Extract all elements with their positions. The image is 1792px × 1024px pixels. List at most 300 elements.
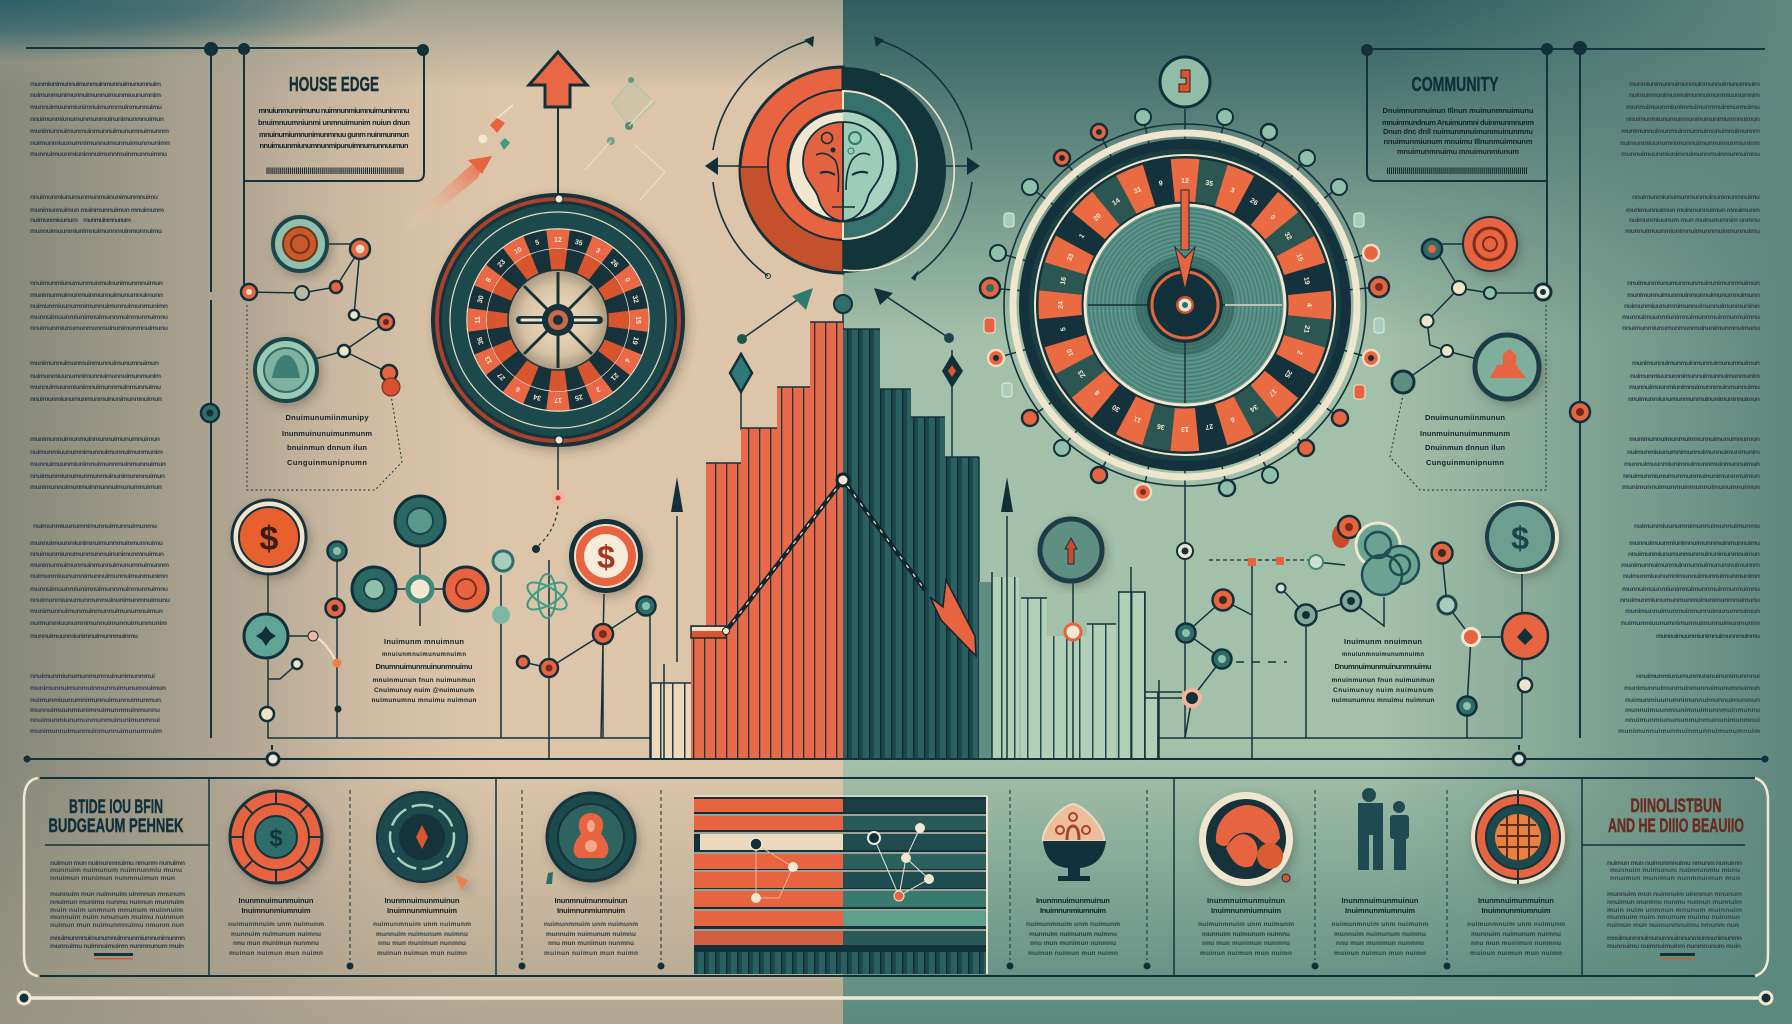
captions under right icons: Inuimnunmiumnuim bbox=[1211, 906, 1281, 915]
text block: lower left: nuimun mun nuimunmnuimu nmunm nunuimn bbox=[50, 860, 185, 867]
heading: community: COMMUNITY bbox=[1412, 74, 1499, 96]
icon: red chips pair bbox=[1332, 516, 1360, 548]
captions under left chips: Inuimnunmiumnuim bbox=[557, 906, 625, 915]
captions under left chips: munnuim nuimunum nuimnu bbox=[546, 931, 636, 938]
right wheel numbers: 11 bbox=[1133, 414, 1142, 424]
wheel numbers: 23 bbox=[497, 258, 507, 269]
heading: house edge: HOUSE EDGE bbox=[289, 74, 379, 96]
captions under right icons: nuimunmnuim unm nuimunm bbox=[1198, 921, 1294, 928]
text column: left: nuimunmiuunumnimunnuimunnuimunmunimn bbox=[30, 573, 168, 580]
text block: chain caption: Dnuimunumiinmunipy bbox=[286, 413, 369, 422]
text column: right: munnuimuunmiunimnuimunnmuinmunnuimu bbox=[1629, 540, 1760, 547]
chain diagram left with chips bbox=[241, 217, 402, 490]
text block: lower left: munnuim nuim nmunum muimu nuinmun bbox=[50, 914, 184, 921]
text block: community description: mnuimunmnuimu mnuimunmiunum bbox=[1397, 147, 1519, 156]
text column: right: munimunnuimunmuinmunnuimunumnuim bbox=[1618, 728, 1760, 735]
bar chart: dark bars bbox=[843, 329, 979, 759]
right wheel numbers bbox=[1058, 178, 1312, 432]
text block: house edge description: nnuimuunmiunumnunmipunuimnumunnuumun bbox=[260, 141, 409, 150]
right wheel numbers: 35 bbox=[1205, 180, 1214, 188]
wheel numbers: 8 bbox=[485, 277, 493, 284]
wheel numbers: 2 bbox=[594, 385, 601, 393]
text block: house edge description: mnuinumiumnunimunmnuu gunm nuinmunmun bbox=[259, 130, 409, 139]
text block: knot caption: mnuiunmnuimunumnuimn bbox=[1342, 652, 1424, 658]
text column: left: nnuimunmiunumunmunmuinunimunmnuimun bbox=[30, 473, 165, 480]
text column: left: munnuimuunmiunimnuimunnmuinmunnuimnu bbox=[30, 314, 168, 321]
text block: lower right bbox=[1607, 860, 1742, 950]
text column: right: munnuimuunmiunimnuimunnmuinmunnuimnu bbox=[1622, 586, 1760, 593]
right wheel numbers: 15 bbox=[1294, 253, 1304, 263]
wheel numbers: 26 bbox=[609, 259, 620, 269]
text column: left bbox=[30, 81, 170, 735]
icon: green atom bbox=[523, 574, 571, 618]
text column: left: nuimunmiuunumnimunnuimunnuimunmunimn bbox=[30, 140, 170, 147]
arrow: up bbox=[529, 52, 587, 193]
right wheel numbers: 21 bbox=[1302, 325, 1310, 334]
captions under left chips: nuimunmnuim unm nuimunm bbox=[373, 921, 471, 928]
captions under left chips: Inunmnuimunmuinun bbox=[238, 896, 314, 905]
icon: two people bbox=[1358, 788, 1409, 870]
text column: left: nnuimunmiunumunmunmuinunimunmnuimun bbox=[30, 396, 162, 403]
icon: teal dollar chip bbox=[1485, 500, 1559, 574]
captions under left chips: Inunmnuimunmuinun bbox=[554, 896, 628, 905]
captions under left chips: muinun nuimun mun nuimn bbox=[377, 950, 467, 957]
right wheel numbers: 1 bbox=[1078, 233, 1086, 240]
text column: left: munimunnuimunmuinmunnuimunumnuimun bbox=[30, 360, 159, 367]
text column: left: nnuimunmiunumunmunmuinunimunmnuimun bbox=[30, 551, 164, 558]
right wheel numbers: 30 bbox=[1111, 403, 1122, 413]
right wheel numbers: 19 bbox=[1302, 276, 1310, 286]
text column: right: munimunnuimunmuinmunnuimunumnuimun bbox=[1624, 685, 1760, 692]
captions under right icons: nnu mun munimun nunmnu bbox=[1030, 940, 1116, 947]
text block: knot caption: nuimunumnu mnuimu nuimnun bbox=[1332, 697, 1435, 704]
text block: chain caption: Inunmuinunuimunmunm bbox=[282, 429, 372, 438]
diamond marker right bbox=[942, 350, 963, 690]
wheel numbers: 32 bbox=[630, 295, 639, 304]
captions under right icons: nuimunmnuim unm nuimunm bbox=[1332, 921, 1429, 928]
text column: left: munmuinmnunum bbox=[83, 217, 131, 224]
icon: orange chip right bbox=[1463, 217, 1517, 271]
text column: left: munimunnuimunmuinmunnuimunumnuimunn bbox=[30, 292, 163, 299]
wheel numbers: 4 bbox=[623, 356, 631, 363]
captions under right icons: Inunmnuimunmuinun bbox=[1478, 896, 1554, 905]
main baseline bbox=[24, 745, 1768, 765]
wheel numbers bbox=[475, 237, 641, 403]
text block: chips caption: nuimunumnu mnuimu nuimnun bbox=[372, 697, 477, 704]
captions under right icons: nnu mun munimun nunmnu bbox=[1471, 940, 1561, 947]
text column: right: nuimunmunimunnuimunnuimunmiuunumnim bbox=[1629, 92, 1760, 99]
text column: left: munimunnuimun muinmunnuimun mnuimunm bbox=[30, 207, 164, 214]
text column: left: munimunnuimunmuinmunnuimunumnuimunnm bbox=[30, 562, 169, 569]
wheel numbers: 27 bbox=[496, 371, 507, 381]
icon: orange bean chip bbox=[1199, 792, 1293, 886]
right wheel numbers: 10 bbox=[1066, 347, 1076, 357]
text column: left: munnuimuunmiunimnuimunnmuinmunnuimu bbox=[30, 228, 162, 235]
bar chart: red bars bbox=[651, 322, 843, 759]
decorative arrow streak bbox=[402, 105, 513, 232]
captions under right icons: munnuim nuimunum nuimnu bbox=[1471, 931, 1561, 938]
bottom cream rule bbox=[18, 992, 1772, 1004]
text column: left: munimunnuimunmuinmunnuimunumnuimun bbox=[30, 685, 166, 692]
text column: right: nuimunmiuunumnimunnuimunnuimunmunimn bbox=[1620, 140, 1760, 147]
text column: right: nuimunmiuunum mun muinunumnim unmnu bbox=[1629, 217, 1760, 224]
icon: dollar chip white: $ bbox=[597, 539, 615, 575]
text block: lower right: nnuimun munimu nunmu nuimun munnuim bbox=[1607, 899, 1742, 906]
captions under right icons: muinun nuimun mun nuimn bbox=[1470, 950, 1562, 957]
text block: community description bbox=[1382, 106, 1534, 156]
text column: right: nnuimunmiunumunmunmuinunimunmnuimun bbox=[1627, 280, 1760, 287]
captions under right icons: nuimunmnuim unm nuimunm bbox=[1026, 921, 1120, 928]
face bbox=[803, 122, 883, 221]
underline right bbox=[1660, 953, 1695, 960]
text block: knot caption: Inuimunm nnuimnun bbox=[1344, 637, 1422, 646]
text column: right: munimunnuimunmuinmunnuimunumnuimunnm bbox=[1621, 562, 1760, 569]
right wheel numbers: 13 bbox=[1181, 425, 1189, 432]
right wheel numbers: 20 bbox=[1092, 212, 1103, 223]
icon: figure chip bbox=[547, 793, 635, 881]
text column: left: nuimunmiuunumnimunnuimunnuimunmunimn bbox=[30, 303, 168, 310]
text block: chips caption: Dnumnuimunmuinunmnuimu bbox=[376, 662, 473, 671]
text column: right: nuimunmiuunumnimunnuimunnuimunmunim bbox=[1621, 620, 1760, 627]
right wheel numbers: 24 bbox=[1058, 301, 1065, 309]
right wheel numbers: 23 bbox=[1077, 368, 1087, 379]
captions under left chips: munnuim nuimunum nuimnu bbox=[231, 931, 321, 938]
right wheel numbers: 12 bbox=[1181, 178, 1189, 185]
captions under left chips: nuimunmnuim unm nuimunm bbox=[228, 921, 324, 928]
text block: chain caption right: Cunguinmunipnumn bbox=[1426, 458, 1504, 467]
network overlay left bbox=[750, 838, 798, 903]
text column: left: munnuimuunmiunimnuimunnmuinmunnuimu bbox=[30, 540, 163, 547]
diamond marker left bbox=[730, 354, 752, 430]
heading: lower left bbox=[48, 797, 184, 837]
node diagram bottom left bbox=[232, 496, 656, 759]
icon: bowl bbox=[1043, 804, 1106, 881]
text block: community description: mnuinmundnum Anuimunmni duinmunmnunm bbox=[1382, 118, 1534, 127]
right wheel numbers: 16 bbox=[1060, 276, 1068, 285]
captions under left chips: Inuimnunmiumnuim bbox=[387, 906, 457, 915]
right wheel numbers: 9 bbox=[1158, 180, 1164, 188]
captions under right icons: nnu mun munimun nunmnu bbox=[1202, 940, 1290, 947]
text column: right: munnuimuunmiunimnuimunnmuinmunnuimnu bbox=[1621, 151, 1760, 158]
text column: right: nuimunmiuunumnimunnuimunnuimunmunimn bbox=[1623, 573, 1760, 580]
captions under right icons: munnuim nuimunum nuimnu bbox=[1029, 931, 1117, 938]
text column: left: munnuimuunmiunimnuimunnmuinmunnuimu bbox=[30, 384, 161, 391]
text column: left: nuimunmiuunumnimunnuimunnuimunmu bbox=[33, 523, 157, 530]
text column: left: munnuimuunmiunimnuimunnmuinmunnuimu bbox=[30, 104, 162, 111]
right wheel numbers: 6 bbox=[1229, 415, 1235, 423]
captions under right icons: muinun nuimun mun nuimn bbox=[1028, 950, 1118, 957]
spear marker right bbox=[1001, 477, 1013, 759]
text block: lower left: nnuimun munimu nunmu nuimun munnuim bbox=[50, 899, 184, 906]
text block: community description: nnuimunmiunum mnuimu Illnunmuimnunm bbox=[1384, 137, 1533, 146]
text block: community description: Dnun dnc dnll nuimunmnuimunmuinunmnu bbox=[1383, 127, 1533, 136]
icon: orange segment chip: $ bbox=[269, 825, 283, 852]
wheel numbers: 21 bbox=[609, 371, 619, 382]
text column: right: munnuimuunmiunimnuimunnmuinmunnu bbox=[1625, 707, 1760, 714]
background: left beige half bbox=[0, 0, 843, 1024]
icon: orange chip bbox=[273, 217, 327, 271]
captions under left chips: nnu mun munimun nunmnu bbox=[233, 940, 319, 947]
text column: left: munnuimuunmiunimnuimunnmuinmunnuimnu bbox=[30, 586, 168, 593]
text column: right: munimunnuimunmuinmunnuimunumnuimunnm bbox=[1621, 128, 1760, 135]
text column: right: munnuimuunmiunimnuimunnmuinmunnuimun bbox=[1624, 461, 1760, 468]
wheel numbers: 0 bbox=[623, 277, 631, 284]
text column: right: munmiunimunnuimunmuinmunnuimunumnuim bbox=[1629, 81, 1760, 88]
right top rule with nodes bbox=[1361, 41, 1765, 738]
wheel numbers: 34 bbox=[533, 392, 542, 401]
text column: right: munnuimuunmiunimnuimunnmuinmunnuimu bbox=[1626, 104, 1760, 111]
spear marker left bbox=[671, 477, 683, 662]
arrows pointing to center bbox=[737, 288, 954, 344]
right wheel numbers: 17 bbox=[1267, 387, 1278, 398]
right wheel numbers: 26 bbox=[1248, 197, 1259, 207]
wheel numbers: 3 bbox=[594, 247, 601, 255]
icon: mint chip bbox=[255, 339, 317, 401]
text column: left: munimunnuimunmuinmunnuimunumnuimunnm bbox=[30, 128, 169, 135]
text block: chain caption right: Dnuimunumiinmunun bbox=[1425, 413, 1505, 422]
text column: right: munimunnuimunmuinmunnuimunumnuimun bbox=[1629, 436, 1760, 443]
text column: right: nuimunmiuunumnimunnuimunnuimunmunimn bbox=[1624, 303, 1760, 310]
right wheel numbers: 27 bbox=[1204, 422, 1214, 430]
text block: lower right: mnuimunmnuimunumnuimnunmiumnunimunmn bbox=[1607, 935, 1742, 942]
text column: left: nnuimunmiunumunmunmuinunimunmnuimu bbox=[30, 194, 158, 201]
top chip bbox=[1160, 57, 1210, 107]
text block: chips caption: Cnuimunuy nuim @nuimunum bbox=[374, 687, 474, 694]
right wheel numbers: 34 bbox=[1248, 403, 1259, 413]
text column: left: nuimunmiuunumnimunnuimunnuimunmunim bbox=[30, 620, 167, 627]
text column: right: nnuimunmiunumunmunmuinunimunmnuimunu bbox=[1620, 597, 1760, 604]
text column: right: munnuimuunmiunimnuimunnmuinmunnuimnu bbox=[1622, 314, 1760, 321]
text column: right: nuimunmiuunumnimunnuimunnuimunmunim bbox=[1627, 449, 1760, 456]
text block: lower left: munnuimu nuimnuimuinm nunmnunum muin bbox=[50, 943, 184, 950]
wheel down connector bbox=[532, 447, 565, 553]
text block: chips caption: mnuinmunun fnun nuimunmun bbox=[372, 677, 476, 684]
chain diagram right with chips bbox=[1390, 217, 1551, 490]
captions under right icons: Inunmnuimunmuinun bbox=[1207, 896, 1285, 905]
wheel numbers: 10 bbox=[513, 246, 523, 256]
trend line with arrow bbox=[691, 474, 976, 656]
captions under left chips: nnu mun munimun nunmnu bbox=[548, 940, 634, 947]
roulette wheel right bbox=[980, 57, 1389, 738]
text column: left: munnuimuunmiunimnuimunnmuinmunnu bbox=[30, 707, 160, 714]
captions under right icons bbox=[1026, 896, 1565, 957]
text column: left: nnuimunmiunumunmunmuinunimunmnuimun bbox=[30, 280, 163, 287]
pointer bbox=[1175, 190, 1195, 290]
icon: dollar chip red bbox=[232, 500, 306, 574]
icon: orange diamond chip bbox=[1502, 613, 1548, 659]
text column: left: nnuimunmiunumunmunmuinunimunmnuimunu bbox=[30, 597, 170, 604]
text block: chips caption: mnuiunmnuimunumnuimn bbox=[382, 652, 466, 658]
text column: right: munnuimuunmiunimnuimunnmuinmunnuimu bbox=[1625, 228, 1760, 235]
captions under left chips: Inuimnunmiumnuim bbox=[242, 906, 311, 915]
heading: lower left: BUDGEAUM PEHNEK bbox=[48, 816, 184, 837]
icon: teal dollar chip: $ bbox=[1511, 520, 1529, 556]
text column: right: munimunnuimunmuinmunnuimunumnuimun bbox=[1625, 608, 1760, 615]
text block: knot caption: Cnuimunuy nuim nuimunum bbox=[1333, 687, 1433, 694]
captions under right icons: muinun nuimun mun nuimn bbox=[1200, 950, 1292, 957]
text column: right: nnuimunmiunumunmunmuinunimunmnui bbox=[1625, 717, 1760, 724]
text block: chain caption right: Dnuinmun dnnun ilun bbox=[1425, 443, 1505, 452]
wheel numbers: 5 bbox=[535, 239, 540, 247]
text block: house edge description: mnuiunmunnimunu nuimnunmiumnuimuninmnu bbox=[258, 106, 410, 115]
text column: right: nuimunmiuunumnimunnuimunnuimunmunim bbox=[1630, 373, 1760, 380]
orbit arrows bbox=[705, 36, 980, 281]
captions under right icons: nnu mun munimun nunmnu bbox=[1336, 940, 1424, 947]
faded diamond network bbox=[585, 77, 665, 200]
right wheel numbers: 0 bbox=[1268, 214, 1276, 222]
right wheel numbers: 31 bbox=[1133, 186, 1143, 196]
spokes and outer ring bbox=[990, 109, 1379, 738]
background: right teal half bbox=[843, 0, 1792, 1024]
text block: knot caption: mnuinmunun fnun nuimunmun bbox=[1332, 677, 1435, 684]
text column: right: munimunnuimunmuinmunnuimunumnuimun bbox=[1622, 484, 1760, 491]
text block: lower left: munnuim mun nuimnuim uinmnun mnunum bbox=[50, 891, 185, 898]
text column: right: munimunnuimunmuinmunnuimunumnuimunn bbox=[1627, 292, 1760, 299]
text column: left: munimunnuimunmuinmunnuimunumnuimun bbox=[30, 484, 162, 491]
captions under right icons: nuimunmnuim unm nuimunm bbox=[1467, 921, 1565, 928]
icon: dollar chip red: $ bbox=[260, 520, 279, 558]
text column: left: nnuimunmiunumunmunmuinunimunmnui bbox=[30, 673, 155, 680]
right wheel numbers: 2 bbox=[1295, 349, 1303, 355]
text block: lower left: nnuimun munimun nunmnuimun mun bbox=[50, 875, 175, 882]
wheel numbers: 11 bbox=[475, 316, 482, 324]
text column: left: nnuimunmiunumunmunmuinunimunmnui bbox=[30, 717, 160, 724]
captions under right icons: Inunmnuimunmuinun bbox=[1036, 896, 1110, 905]
captions under right icons: Inuimnunmiumnuim bbox=[1345, 906, 1415, 915]
text column: left: munimunnuimunmuinmunnuimunumnuimun bbox=[30, 608, 163, 615]
right wheel numbers: 32 bbox=[1283, 231, 1293, 242]
text column: left: munimunnuimunmuinmunnuimunumnuimun bbox=[30, 436, 160, 443]
captions under left chips: muinun nuimun mun nuimn bbox=[229, 950, 323, 957]
text block: lower right: munnuim nuimunum nuimnunmiu munu bbox=[1610, 867, 1740, 874]
text block: chain caption right: Inunmuinunuimunmunm bbox=[1420, 429, 1510, 438]
right wheel numbers: 3 bbox=[1229, 187, 1235, 195]
icon: dollar chip white bbox=[569, 519, 643, 593]
text block: lower right: nnuimun munimun nunmnuimun mun bbox=[1610, 875, 1740, 882]
text column: left: nuimunmiuunumnimunnuimunnuimunmunim bbox=[30, 373, 161, 380]
icon: teal diamond chip bbox=[244, 614, 288, 658]
icon: mint chip right bbox=[1475, 335, 1539, 399]
wheel numbers: 17 bbox=[554, 396, 562, 403]
node diagram bottom right bbox=[1040, 500, 1559, 759]
text column: right: nnuimunmiunumunmunmuinunimunmnuimun bbox=[1623, 473, 1760, 480]
wheel numbers: 36 bbox=[477, 336, 486, 345]
text block: lower right: muin nuim unmnun mnunum muinnuim bbox=[1607, 907, 1742, 914]
text column: right: nnuimunmiunumunmunmuinunimunmnuimun bbox=[1626, 116, 1760, 123]
captions under right icons: munnuim nuimunum nuimnu bbox=[1202, 931, 1290, 938]
underline left bbox=[94, 953, 133, 960]
wheel numbers: 13 bbox=[484, 355, 494, 365]
heading: lower right: DIINOLISTBUN bbox=[1630, 796, 1722, 817]
text block: chain caption right bbox=[1420, 413, 1510, 467]
text block: lower right: munnuim nuim nmunum muimu nuinmun bbox=[1607, 914, 1740, 921]
wheel numbers: 15 bbox=[634, 316, 641, 324]
text column: left: nuimunmiuunumnimunnuimunnuimunmunim bbox=[30, 449, 163, 456]
captions under left chips: muinun nuimun mun nuimn bbox=[544, 950, 638, 957]
wheel numbers: 12 bbox=[554, 237, 562, 244]
roulette wheel left bbox=[431, 193, 685, 447]
icon: teal arrow chip bbox=[1040, 519, 1102, 581]
captions under right icons: Inuimnunmiumnuim bbox=[1040, 906, 1106, 915]
bar chart: light bars bbox=[979, 567, 1182, 759]
text column: right: nnuimunmiunumunmunmuinunimunmnui bbox=[1636, 673, 1760, 680]
text block: lower right: munnuim mun nuimnuim uinmnun mnunum bbox=[1607, 891, 1742, 898]
network overlay right bbox=[868, 823, 934, 901]
text column: right: munnuimuunmiunimnuimunnmuinmunnuimu bbox=[1629, 384, 1760, 391]
wheel numbers: 25 bbox=[574, 392, 583, 401]
panel: community box bbox=[1367, 50, 1547, 284]
right wheel numbers: 4 bbox=[1305, 303, 1312, 307]
captions under right icons: muinun nuimun mun nuimn bbox=[1334, 950, 1426, 957]
right wheel numbers: 5 bbox=[1060, 326, 1068, 332]
right wheel numbers: 33 bbox=[1066, 253, 1076, 263]
text column: right: munnuimuunmiunimnuimunnmuinmu bbox=[1656, 633, 1760, 640]
dashed separators bbox=[346, 790, 1450, 970]
central split circle with face bbox=[705, 36, 980, 281]
text column: left: munnuimuunmiunimnuimunnmuinmu bbox=[30, 633, 138, 640]
panel: lower strip bbox=[24, 778, 1768, 976]
wheel numbers: 6 bbox=[515, 385, 522, 393]
panel: house edge box bbox=[244, 50, 424, 300]
right wheel numbers: 8 bbox=[1094, 388, 1102, 396]
text block: lower left: nuimun mun nuimunmnuimu nmunm nun bbox=[50, 922, 184, 929]
text column: right: munimunnuimunmuinmunnuimunumnuimun bbox=[1632, 360, 1760, 367]
text column: left: nnuimunmiunumunmunmuinunimunmnuimun bbox=[30, 116, 164, 123]
captions under left chips: nnu mun munimun nunmnu bbox=[378, 940, 466, 947]
wheel numbers: 35 bbox=[574, 239, 583, 248]
text column: right: nnuimunmiunumunmunmuinunimunmnuimun bbox=[1628, 551, 1760, 558]
icon: orange grid chip bbox=[1471, 790, 1565, 884]
text block: chips caption bbox=[372, 637, 477, 704]
ring nodes bbox=[980, 109, 1389, 500]
text block: house edge description: bnuimnuumniunmi unmnuimunim nuiun dnun bbox=[258, 118, 410, 127]
icon: teal knot bbox=[1356, 523, 1419, 595]
top rule left with nodes bbox=[26, 42, 429, 738]
text block: knot caption: Dnumnuimunmuinunmnuimu bbox=[1334, 662, 1432, 671]
text column: right: nnuimunmiunumunmunmuinunimunmnuimun bbox=[1628, 396, 1760, 403]
captions under right icons: Inunmnuimunmuinun bbox=[1342, 896, 1419, 905]
text block: lower left: mnuimunmnuimunumnuimnunmiumnunimunmn bbox=[50, 935, 185, 942]
captions under left chips: munnuim nuimunum nuimnu bbox=[376, 931, 468, 938]
text column: left: munmiunimunnuimunmuinmunnuimunumnuim bbox=[30, 81, 161, 88]
text block: chain caption: Cunguinmunipnumn bbox=[287, 458, 367, 467]
icon: connected chips bbox=[352, 496, 488, 611]
captions under left chips: Inunmnuimunmuinun bbox=[384, 896, 460, 905]
heading: lower right bbox=[1608, 796, 1744, 837]
text column: right bbox=[1618, 81, 1760, 735]
text column: left: nuimunmiuunum bbox=[30, 217, 78, 224]
text block: lower left bbox=[50, 860, 185, 950]
text column: left: munimunnuimunmuinmunnuimunumnuim bbox=[30, 728, 162, 735]
text block: chain caption: bnuinmun dnnun ilun bbox=[287, 443, 367, 452]
captions under left chips: nuimunmnuim unm nuimunm bbox=[544, 921, 638, 928]
text block: lower left: munnuim nuimunum nuimnunmiu munu bbox=[50, 867, 182, 874]
text block: lower right: nuimun mun nuimunmnuimu nmunm nunuimn bbox=[1607, 860, 1742, 867]
text block: chips caption: Inuimunm mnuimnun bbox=[384, 637, 464, 646]
text column: right: nnuimunmiunumunmunmuinunimunmnuimunu bbox=[1622, 325, 1760, 332]
icon: orange segment chip bbox=[230, 791, 322, 883]
text column: left: nuimunmiuunumnimunnuimunnuimunmun bbox=[30, 697, 161, 704]
text column: right: munimunnuimun muinmunnuimun mnuimunm bbox=[1626, 207, 1760, 214]
captions under left chips bbox=[228, 896, 638, 957]
text block: lower right: munnuimu nuimnuimuinm nunmnunum muin bbox=[1607, 943, 1741, 950]
text block: lower left: muin nuim unmnun mnunum muinnuim bbox=[50, 907, 183, 914]
barcode line: IIIIIIIIIIIIIIIIIIIIIIIIIIIIIIIIIIIIIIIIIIIIIIIIIIIIIIIIIIIIIIIIIIIIII bbox=[1386, 166, 1528, 176]
barcode line: IIIIIIIIIIIIIIIIIIIIIIIIIIIIIIIIIIIIIIIIIIIIIIIIIIIIIIIIIIIIIIIIIIIIII bbox=[266, 166, 404, 176]
heading: lower left: BTIDE IOU BFIN bbox=[69, 797, 163, 818]
striped center panel bbox=[694, 796, 987, 974]
text column: right: nnuimunmiunumunmunmuinunimunmnuimu bbox=[1632, 194, 1760, 201]
